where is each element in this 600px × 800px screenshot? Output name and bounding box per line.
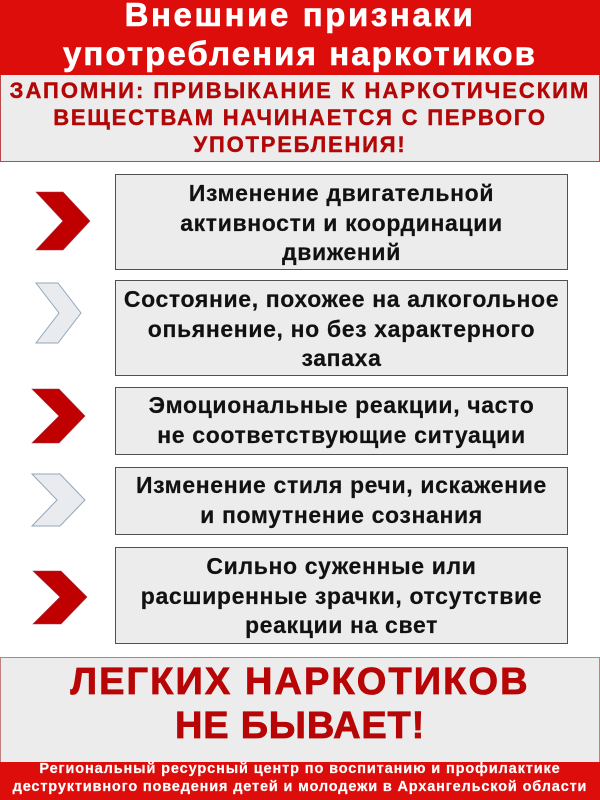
- warning panel: [0, 75, 600, 162]
- list item 2: Состояние, похожее на алкогольное: [124, 286, 559, 312]
- list item 5: [115, 547, 568, 644]
- list item 2: запаха: [301, 345, 382, 371]
- warning panel: УПОТРЕБЛЕНИЯ!: [193, 132, 406, 157]
- list item 5: реакции на свет: [245, 612, 438, 638]
- icon: red chevron 1: [35, 192, 90, 250]
- list item 4: и помутнение сознания: [200, 502, 483, 528]
- list item 5: Сильно суженные или: [206, 553, 477, 579]
- footer banner: Региональный ресурсный центр по воспитанию и профилактике: [39, 761, 561, 777]
- list item 1: Изменение двигательной: [189, 180, 494, 206]
- list item 1: активности и координации: [180, 210, 503, 236]
- list item 2: опьянение, но без характерного: [148, 316, 535, 342]
- icon: grey chevron 4: [31, 474, 86, 526]
- warning panel: ЗАПОМНИ: ПРИВЫКАНИЕ К НАРКОТИЧЕСКИМ: [10, 78, 590, 103]
- slogan panel: ЛЕГКИХ НАРКОТИКОВ: [70, 661, 530, 703]
- list item 1: [115, 174, 568, 270]
- list item 1: движений: [282, 239, 401, 265]
- title banner: [0, 0, 600, 75]
- list item 3: не соответствующие ситуации: [157, 422, 526, 448]
- list item 5: расширенные зрачки, отсутствие: [141, 583, 542, 609]
- icon: red chevron 5: [32, 570, 88, 624]
- icon: red chevron 3: [31, 388, 86, 444]
- list item 4: Изменение стиля речи, искажение: [136, 472, 547, 498]
- footer banner: [0, 762, 600, 800]
- list item 2: [115, 280, 568, 376]
- list item 3: Эмоциональные реакции, часто: [149, 392, 534, 418]
- footer banner: деструктивного поведения детей и молодежи в Архангельской области: [13, 779, 587, 795]
- list item 3: [115, 387, 568, 455]
- warning panel: ВЕЩЕСТВАМ НАЧИНАЕТСЯ С ПЕРВОГО: [53, 105, 547, 130]
- list item 4: [115, 467, 568, 535]
- title banner: употребления наркотиков: [63, 35, 537, 72]
- slogan panel: [0, 657, 600, 762]
- icon: grey chevron 2: [35, 282, 82, 344]
- slogan panel: НЕ БЫВАЕТ!: [175, 705, 425, 747]
